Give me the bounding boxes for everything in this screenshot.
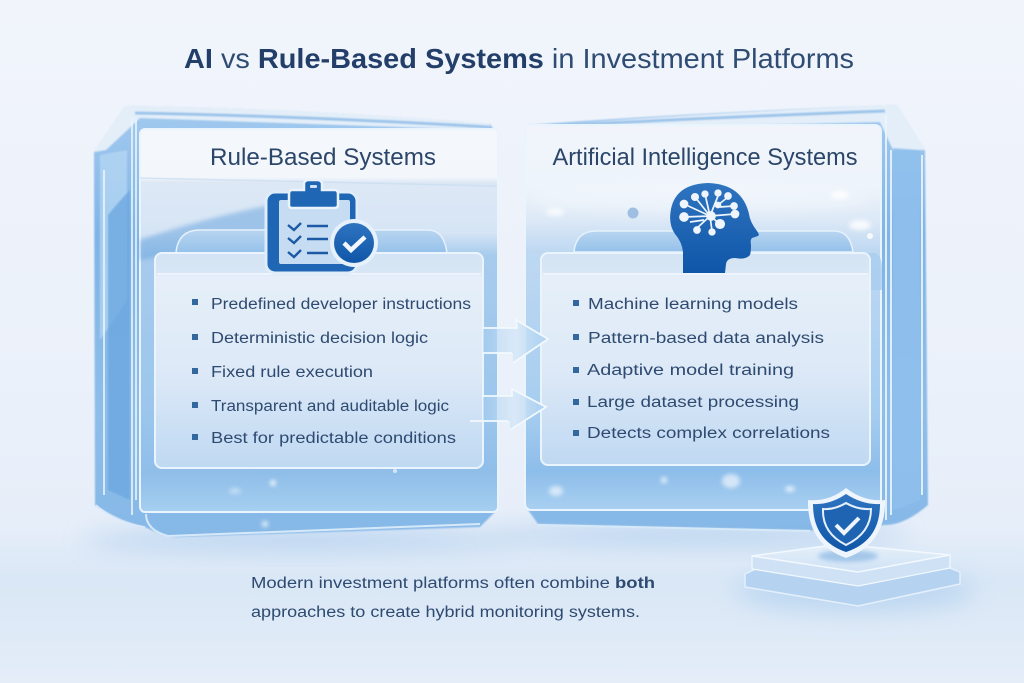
list: rule-based features: Best for predictable conditions (211, 430, 456, 447)
list: ai features: Adaptive model training (587, 362, 794, 379)
platform base (745, 568, 960, 606)
panel depth layers (527, 105, 928, 531)
list: rule-based features: Fixed rule execution (211, 364, 373, 381)
caption (251, 575, 655, 621)
list: ai features: Machine learning models (588, 296, 798, 313)
caption: approaches to create hybrid monitoring systems. (251, 604, 640, 621)
list: rule-based features (192, 296, 471, 447)
arrow: upper connector (483, 320, 548, 363)
back folder tab (574, 231, 853, 252)
list: rule-based features: Transparent and auditable logic (211, 398, 449, 415)
title: AI vs Rule-Based Systems in Investment Platforms (184, 43, 854, 74)
content card (541, 253, 870, 465)
platform top (752, 544, 950, 586)
panel: rule-based systems (94, 106, 498, 537)
list: rule-based features: Deterministic decision logic (211, 330, 428, 347)
back folder tab (176, 230, 447, 253)
panel depth layers (94, 106, 497, 537)
list: ai features (573, 296, 830, 442)
heading: artificial intelligence systems: Artificial Intelligence Systems (552, 144, 858, 171)
list: ai features: Detects complex correlations (587, 425, 830, 442)
list: ai features: Large dataset processing (587, 394, 799, 411)
icon: head with neural network (670, 183, 759, 273)
list: rule-based features: Predefined developer instructions (211, 296, 471, 313)
icon: shield on platform (745, 488, 960, 606)
icon: clipboard with check (266, 180, 378, 273)
panel: artificial intelligence systems (525, 105, 928, 531)
content card (155, 253, 483, 468)
caption: Modern investment platforms often combine both (251, 575, 655, 592)
list: ai features: Pattern-based data analysis (588, 330, 824, 347)
front glass panel (525, 125, 881, 510)
front glass panel (140, 129, 498, 512)
heading: rule-based systems: Rule-Based Systems (210, 144, 436, 171)
shield (808, 488, 885, 562)
arrow: lower connector (470, 389, 546, 430)
